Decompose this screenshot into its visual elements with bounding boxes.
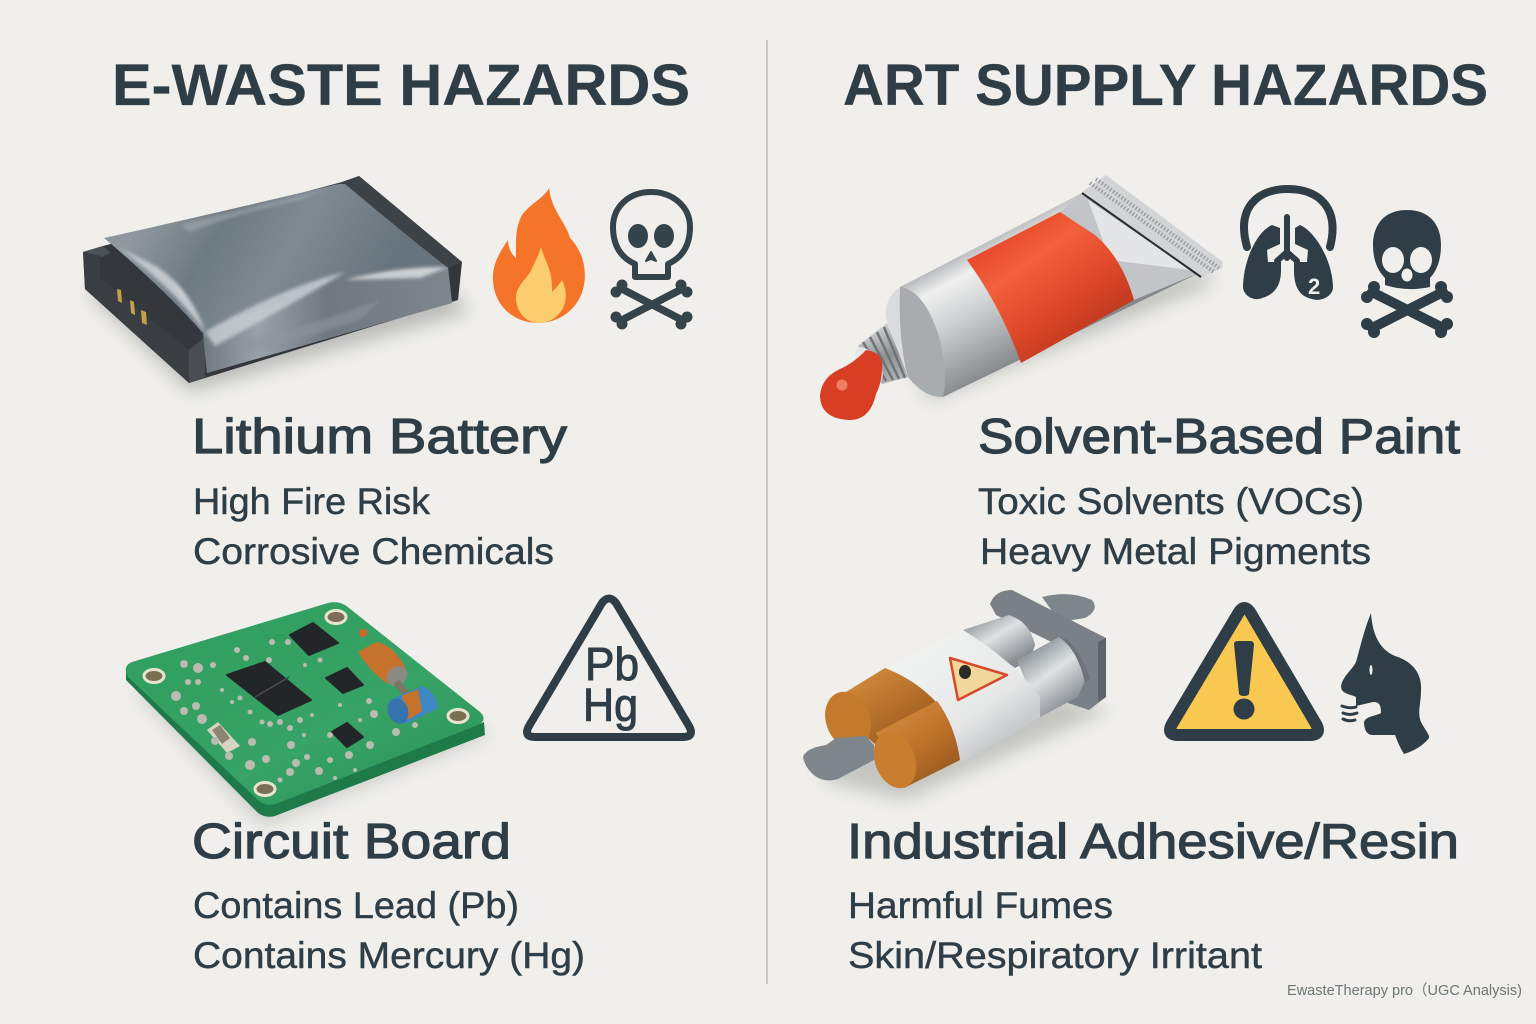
text: O2 subscript: 2 <box>1308 274 1320 299</box>
text: corrosive chemicals: Corrosive Chemicals <box>193 531 554 572</box>
text: Hg: Hg <box>583 679 638 731</box>
text: harmful fumes: Harmful Fumes <box>848 885 1113 926</box>
illustration: lithium battery <box>83 176 470 392</box>
text: Pb: Pb <box>585 638 639 690</box>
copper cartridge back <box>817 668 937 755</box>
icon: flame <box>493 188 585 323</box>
mounting holes <box>144 610 468 796</box>
icon: warning triangle <box>1170 608 1318 735</box>
icon: lungs <box>1243 189 1333 300</box>
panel: e-waste hazards <box>83 53 692 976</box>
icon: skull and crossbones outline <box>610 192 692 330</box>
text: contains lead: Contains Lead (Pb) <box>193 885 519 926</box>
text: skin/respiratory irritant: Skin/Respiratory Irritant <box>848 935 1263 976</box>
icon: solid skull and crossbones <box>1361 210 1453 338</box>
label: circuit board: Circuit Board <box>192 814 511 869</box>
text: contains mercury: Contains Mercury (Hg) <box>193 935 585 976</box>
label: lithium battery: Lithium Battery <box>192 409 567 464</box>
illustration: paint tube <box>820 175 1223 420</box>
solder components <box>171 639 418 782</box>
icon: Pb Hg warning triangle <box>527 598 691 737</box>
icon: face exhaling fumes <box>1341 613 1429 754</box>
hazard label <box>950 658 1007 700</box>
capacitor blue <box>384 686 438 727</box>
capacitor copper <box>358 642 411 690</box>
plunger and flange <box>990 590 1106 710</box>
label: solvent-based paint: Solvent-Based Paint <box>978 409 1460 464</box>
chips <box>227 623 363 747</box>
nozzle <box>803 736 874 780</box>
text: high fire risk: High Fire Risk <box>193 481 430 522</box>
paint drop <box>820 350 882 420</box>
illustration: circuit board <box>126 602 490 825</box>
text: heavy metal pigments: Heavy Metal Pigments <box>980 531 1371 572</box>
heading: e-waste hazards: E-WASTE HAZARDS <box>112 53 690 118</box>
tube neck <box>850 323 908 387</box>
panel: art supply hazards <box>803 53 1488 976</box>
centre divider <box>766 40 768 984</box>
text: toxic solvents: Toxic Solvents (VOCs) <box>978 481 1364 522</box>
watermark credit: EwasteTherapy pro（UGC Analysis) <box>1287 982 1522 999</box>
copper cartridge front <box>866 701 960 794</box>
illustration: adhesive cartridge <box>803 590 1110 800</box>
label: industrial adhesive/resin: Industrial Adhesive/Resin <box>847 814 1459 869</box>
white label band <box>885 630 1040 762</box>
heading: art supply hazards: ART SUPPLY HAZARDS <box>843 53 1488 118</box>
